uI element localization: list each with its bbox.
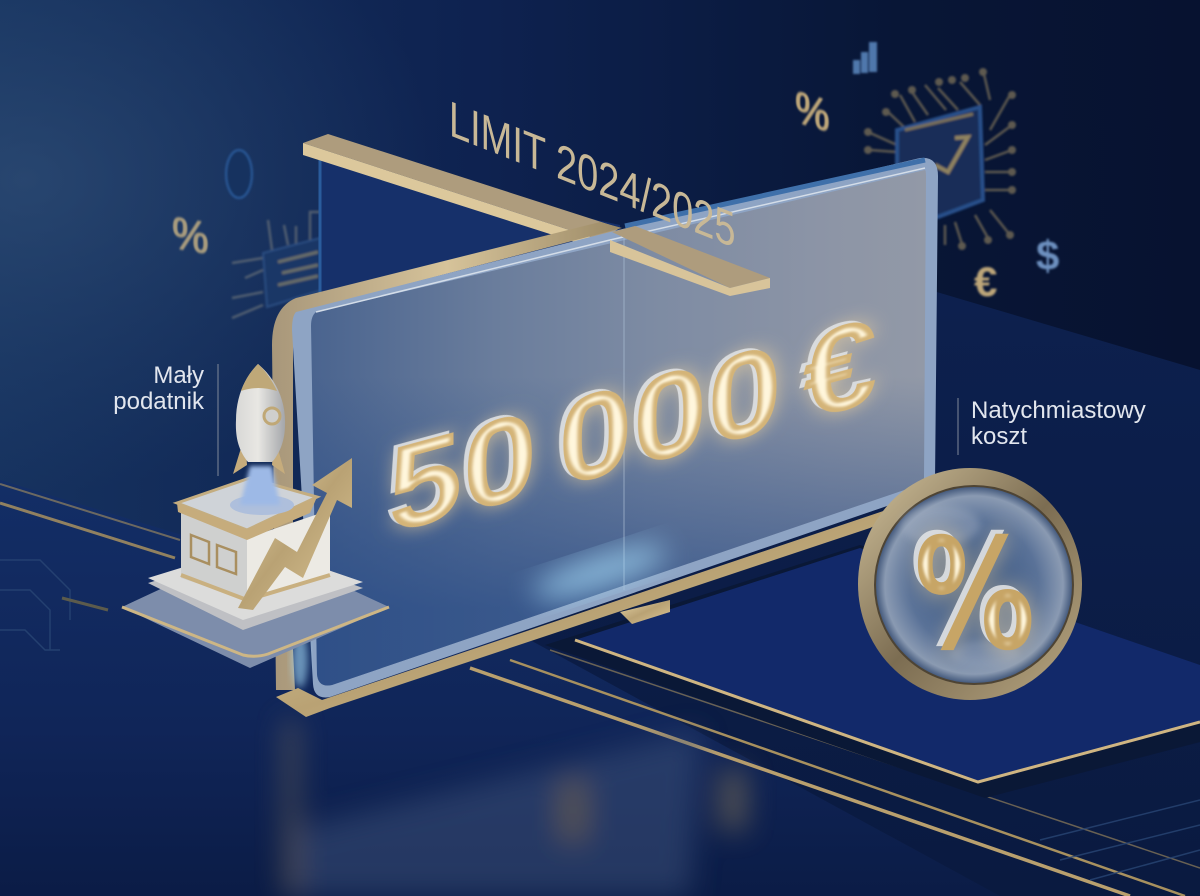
rocket [233,435,285,474]
icon: faint dollar coin [226,150,252,198]
label: maly podatnik: podatnik [113,388,205,415]
icon: mini bar chart [853,42,877,74]
glass panel [272,158,938,717]
main figure: 50 000 euro: 50 000 € [388,290,877,560]
icon: dollar: $ [1036,232,1059,279]
icon: chip right [864,68,1016,250]
coin with percent [858,468,1082,700]
coin with percent: % [914,505,1035,685]
label: maly podatnik [113,362,218,476]
white plate [148,550,363,630]
floor gold rails [0,484,1200,896]
glass base plate [122,545,389,668]
growth arrow [238,458,352,610]
velvet mat [545,545,1200,798]
icon: euro: € [974,258,997,305]
label: natychmiastowy koszt [958,397,1146,455]
windows [191,535,209,564]
roof [177,478,317,530]
icon: building with rocket and arrow [122,364,389,668]
icon: percent right: % [795,82,830,143]
label: natychmiastowy koszt: koszt [971,423,1027,450]
top bar front part [610,226,770,296]
icon: percent left: % [172,207,209,265]
heading: limit: LIMIT 2024/2025 [449,90,736,259]
label: maly podatnik: Mały [153,362,204,389]
reflection on floor [285,720,746,896]
floating icons [172,42,1059,318]
rear frosted panel and gold bar [303,134,620,300]
circuit traces on floor [0,560,1200,880]
exhaust cloud and flame [230,495,294,515]
icon: chip left [232,212,323,318]
walls [181,510,247,600]
label: natychmiastowy koszt: Natychmiastowy [971,397,1146,424]
